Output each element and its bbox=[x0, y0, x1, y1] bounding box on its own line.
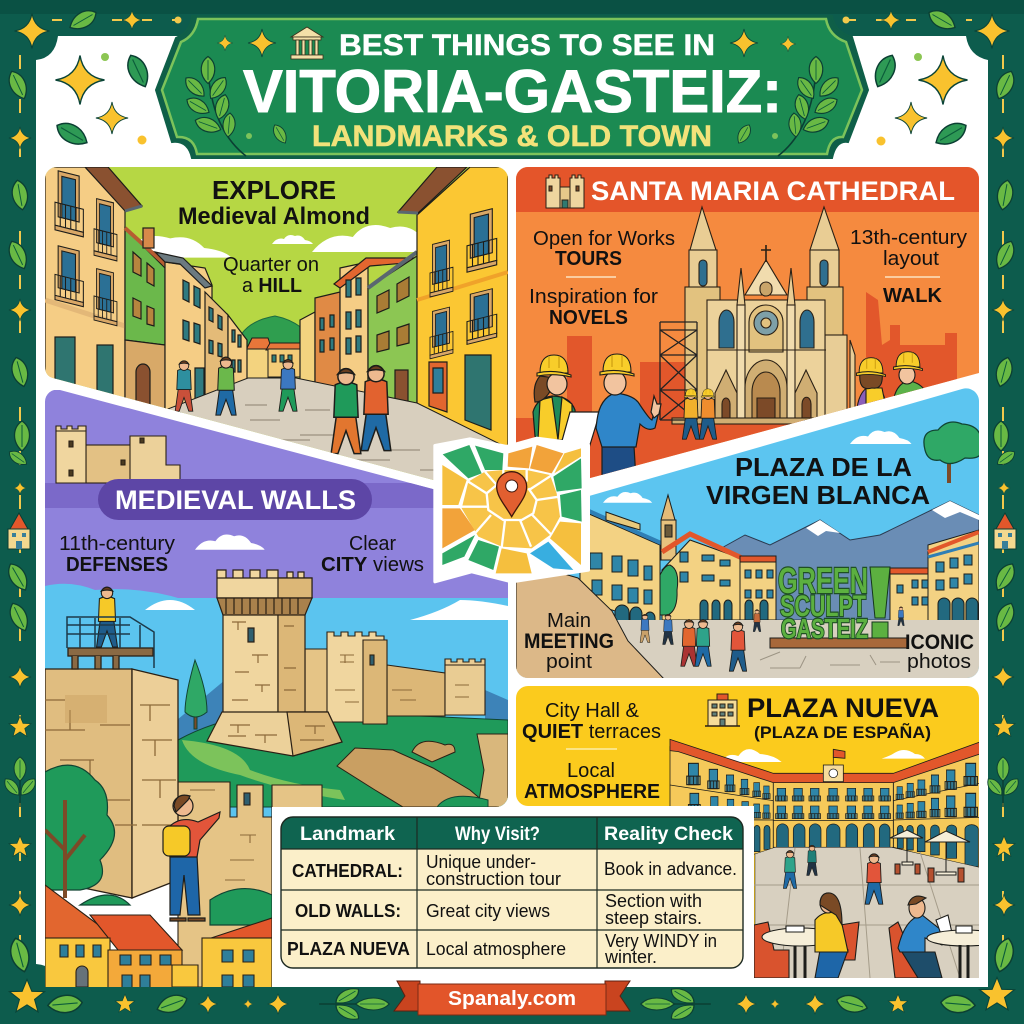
icon: castle bbox=[546, 175, 584, 208]
text: 11th-century defenses bbox=[59, 533, 175, 576]
text: iconic photos: ICONIC bbox=[905, 631, 974, 654]
illustration: green sculpture bbox=[770, 560, 907, 648]
banner decorations bbox=[217, 29, 796, 146]
illustration: plaza walkers bbox=[783, 845, 883, 904]
border pattern bottom bbox=[9, 977, 1015, 1023]
heading pill: medieval walls: MEDIEVAL WALLS bbox=[115, 485, 356, 515]
title line two: VITORIA-GASTEIZ: bbox=[243, 58, 782, 125]
text: city hall and quiet terraces bbox=[522, 700, 661, 743]
text: quarter on a hill bbox=[223, 254, 319, 297]
text: local atmosphere: Local bbox=[567, 760, 615, 782]
illustration: cafe table right bbox=[889, 896, 1003, 978]
table row: old walls: steep stairs. bbox=[605, 908, 702, 928]
text: local atmosphere: ATMOSPHERE bbox=[524, 781, 660, 803]
panel: explore medieval almond bbox=[45, 167, 508, 510]
text: open for works tours: Open for Works bbox=[533, 228, 675, 250]
laurel branch left bbox=[181, 56, 246, 156]
icon: museum temple bbox=[291, 27, 323, 59]
table row: old walls bbox=[295, 891, 702, 928]
table header: Landmark bbox=[300, 824, 395, 845]
heading: plaza de la virgen blanca: VIRGEN BLANCA bbox=[706, 480, 930, 510]
illustration: foreground tower bbox=[45, 648, 178, 898]
text: inspiration for novels: NOVELS bbox=[549, 307, 628, 329]
table row: cathedral: Unique under- bbox=[426, 852, 536, 872]
corner decorations top right bbox=[870, 52, 970, 150]
illustration: bottom houses bbox=[45, 885, 272, 988]
table row: plaza nueva: Very WINDY in bbox=[605, 931, 717, 951]
heading: plaza de la virgen blanca: PLAZA DE LA bbox=[735, 452, 912, 482]
illustration: cafe table left bbox=[754, 893, 859, 978]
illustration: walkers bbox=[175, 357, 391, 454]
illustration: terrace umbrellas bbox=[890, 830, 970, 882]
table header bbox=[300, 824, 733, 845]
comparison table bbox=[272, 808, 754, 987]
heading: plaza nueva: PLAZA NUEVA bbox=[747, 693, 939, 723]
illustration: wall section bbox=[305, 632, 485, 724]
border pattern top bbox=[52, 6, 972, 34]
illustration: green sculpture: SCULPT bbox=[780, 590, 866, 623]
illustration: lower wall bbox=[178, 782, 322, 987]
table row: cathedral: construction tour bbox=[426, 869, 561, 889]
table row: plaza nueva: Local atmosphere bbox=[426, 939, 566, 959]
laurel branch right bbox=[778, 56, 843, 156]
illustration: engineer woman bbox=[533, 355, 600, 450]
illustration: scaffold bbox=[660, 322, 697, 420]
illustration: trees bbox=[45, 765, 272, 925]
text: city hall and quiet terraces: City Hall & bbox=[545, 700, 640, 722]
title line three: LANDMARKS & OLD TOWN bbox=[312, 120, 712, 153]
text: clear city views bbox=[321, 533, 424, 576]
text: quarter on a hill: a HILL bbox=[242, 275, 302, 297]
footer ribbon bbox=[394, 981, 630, 1015]
title line one: BEST THINGS TO SEE IN bbox=[339, 29, 715, 62]
illustration: green sculpture: GASTEIZ bbox=[781, 613, 868, 644]
heading pill: medieval walls bbox=[98, 479, 372, 520]
plaza windows bbox=[687, 763, 977, 819]
illustration: hiker bbox=[163, 795, 220, 921]
illustration: engineer man bbox=[596, 354, 661, 480]
text: clear city views: Clear bbox=[349, 533, 396, 555]
illustration: cathedral bbox=[672, 207, 872, 424]
text: main meeting point: MEETING bbox=[524, 630, 614, 653]
panel: medieval walls bbox=[45, 390, 508, 988]
illustration: mountains bbox=[700, 501, 979, 620]
illustration: left square buildings bbox=[580, 493, 776, 620]
text: main meeting point: Main bbox=[547, 610, 591, 632]
illustration: far hills and ground bbox=[178, 682, 222, 739]
illustration: viewer on balcony bbox=[67, 587, 154, 668]
table row: cathedral: CATHEDRAL: bbox=[292, 861, 403, 881]
heading: plaza nueva: (PLAZA DE ESPAÑA) bbox=[754, 722, 931, 742]
illustration: right street buildings bbox=[300, 167, 508, 450]
illustration: main tower bbox=[207, 570, 342, 756]
text: city hall and quiet terraces: QUIET terraces bbox=[522, 721, 661, 743]
plaza arcade arches bbox=[754, 824, 978, 867]
text: 13th-century layout: 13th-century bbox=[850, 227, 967, 249]
illustration: red skyline bbox=[567, 292, 979, 420]
illustration: right workers bbox=[857, 352, 926, 410]
heading: explore: EXPLORE bbox=[212, 175, 336, 205]
illustration: paved square bbox=[516, 620, 979, 680]
illustration: distant houses bbox=[246, 338, 300, 379]
text: quarter on a hill: Quarter on bbox=[223, 254, 319, 276]
panel: plaza nueva bbox=[516, 686, 1003, 981]
corner decorations top left bbox=[53, 52, 153, 150]
text: open for works tours bbox=[533, 228, 675, 270]
table row: old walls: Section with bbox=[605, 891, 702, 911]
table row: old walls: OLD WALLS: bbox=[295, 901, 401, 921]
footer ribbon: Spanaly.com bbox=[448, 988, 576, 1010]
border pattern right bbox=[974, 14, 1022, 974]
table row: cathedral bbox=[292, 852, 737, 889]
illustration: plaza square buildings bbox=[670, 739, 980, 980]
text: main meeting point: point bbox=[546, 651, 592, 673]
panel: plaza de la virgen blanca bbox=[516, 380, 982, 680]
text: 13th-century layout: layout bbox=[883, 248, 939, 270]
text: 11th-century defenses: 11th-century bbox=[59, 533, 175, 555]
table row: plaza nueva bbox=[287, 931, 717, 967]
text: open for works tours: TOURS bbox=[555, 248, 622, 270]
illustration: tree bbox=[924, 422, 982, 483]
text: local atmosphere bbox=[524, 760, 660, 803]
table row: plaza nueva: PLAZA NUEVA bbox=[287, 939, 410, 959]
illustration: cobbled street bbox=[167, 378, 501, 480]
icon: city hall building bbox=[705, 694, 740, 726]
illustration: distant castle bbox=[56, 426, 180, 483]
heading: plaza de la virgen blanca bbox=[706, 452, 930, 510]
table row: plaza nueva: winter. bbox=[604, 947, 657, 967]
illustration: poplar tree bbox=[185, 660, 207, 729]
illustration: plaza people bbox=[640, 607, 904, 671]
table row: old walls: Great city views bbox=[426, 901, 550, 921]
table header: Why Visit? bbox=[455, 824, 540, 845]
text: 11th-century defenses: DEFENSES bbox=[66, 554, 168, 576]
illustration: tan hillside bbox=[516, 574, 664, 678]
illustration: right square buildings bbox=[890, 530, 979, 622]
text: iconic photos: photos bbox=[907, 651, 971, 673]
heading: plaza nueva bbox=[747, 693, 939, 742]
title banner bbox=[156, 16, 868, 158]
text: 13th-century layout bbox=[850, 227, 967, 270]
illustration: rocks bbox=[337, 734, 508, 807]
icon: map pin bbox=[497, 472, 527, 517]
illustration: green sculpture: GREEN bbox=[778, 560, 868, 601]
heading: medieval almond: Medieval Almond bbox=[178, 203, 370, 230]
text: main meeting point bbox=[524, 610, 614, 673]
table row: cathedral: Book in advance. bbox=[604, 859, 737, 879]
text: inspiration for novels bbox=[529, 286, 658, 329]
text: clear city views: CITY views bbox=[321, 554, 424, 576]
heading: santa maria cathedral: SANTA MARIA CATHEDRAL bbox=[591, 176, 955, 206]
illustration: small workers bbox=[682, 389, 717, 439]
illustration: left street buildings bbox=[45, 167, 247, 420]
border pattern left bbox=[1, 14, 50, 974]
text: walk: WALK bbox=[883, 285, 943, 307]
panel: santa maria cathedral bbox=[516, 167, 979, 507]
text: iconic photos bbox=[905, 631, 974, 673]
text: inspiration for novels: Inspiration for bbox=[529, 286, 658, 308]
central city map bbox=[435, 438, 588, 582]
table header: Reality Check bbox=[604, 824, 733, 845]
